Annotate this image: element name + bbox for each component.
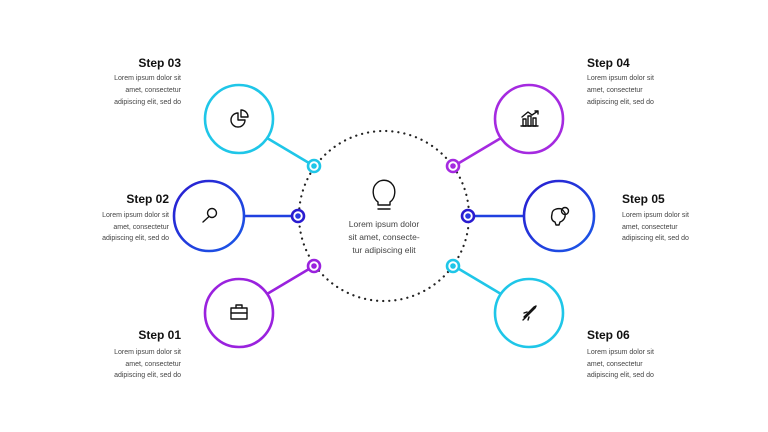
text: step 02: Step 02 <box>126 192 169 206</box>
icon: light bulb <box>373 180 395 209</box>
text: step 06: Step 06 <box>587 328 630 342</box>
text: step 05: adipiscing elit, sed do <box>622 235 689 242</box>
text: step 03: Step 03 <box>138 56 181 70</box>
text: step 01: Lorem ipsum dolor sit <box>114 349 181 356</box>
text: step 02 <box>102 192 170 242</box>
text: step 05: Lorem ipsum dolor sit <box>622 212 689 219</box>
text: step 05: amet, consectetur <box>622 224 678 231</box>
text: step 03: adipiscing elit, sed do <box>114 99 181 106</box>
step 03 connector & circle (cyan) <box>205 85 320 172</box>
text: step 02: amet, consectetur <box>113 224 170 231</box>
text: step 05 <box>622 192 689 242</box>
step 05 connector & circle (blue) <box>462 181 594 251</box>
text: step 06: Lorem ipsum dolor sit <box>587 349 654 356</box>
icon: magnifier <box>203 208 216 222</box>
text: step 04: Lorem ipsum dolor sit <box>587 75 654 82</box>
center text: sit amet, consecte- <box>348 232 420 242</box>
icon: rocket <box>523 306 536 320</box>
icon: pie chart <box>231 110 248 127</box>
step 01 connector & circle (purple) <box>205 260 320 347</box>
text: step 06: amet, consectetur <box>587 361 643 368</box>
text: step 01 <box>114 328 182 379</box>
text: step 04 <box>587 56 654 106</box>
center text <box>348 219 420 255</box>
step 06 connector & circle (cyan) <box>447 260 563 347</box>
text: step 01: adipiscing elit, sed do <box>114 372 181 379</box>
text: step 05: Step 05 <box>622 192 665 206</box>
text: step 01: amet, consectetur <box>125 361 182 368</box>
text: step 06 <box>587 328 654 379</box>
text: step 03: amet, consectetur <box>125 87 182 94</box>
text: step 01: Step 01 <box>138 328 181 342</box>
step 04 connector & circle (purple) <box>447 85 563 172</box>
icon: briefcase <box>231 305 247 319</box>
text: step 02: adipiscing elit, sed do <box>102 235 169 242</box>
center text: tur adipiscing elit <box>352 245 416 255</box>
icon: piggy bank <box>552 208 568 225</box>
text: step 04: adipiscing elit, sed do <box>587 99 654 106</box>
text: step 04: Step 04 <box>587 56 630 70</box>
text: step 03: Lorem ipsum dolor sit <box>114 75 181 82</box>
text: step 06: adipiscing elit, sed do <box>587 372 654 379</box>
text: step 02: Lorem ipsum dolor sit <box>102 212 169 219</box>
text: step 03 <box>114 56 182 106</box>
center dotted circle <box>299 131 469 301</box>
step 02 connector & circle (blue) <box>174 181 304 251</box>
text: step 04: amet, consectetur <box>587 87 643 94</box>
center text: Lorem ipsum dolor <box>349 219 419 229</box>
icon: bar chart <box>521 111 538 126</box>
